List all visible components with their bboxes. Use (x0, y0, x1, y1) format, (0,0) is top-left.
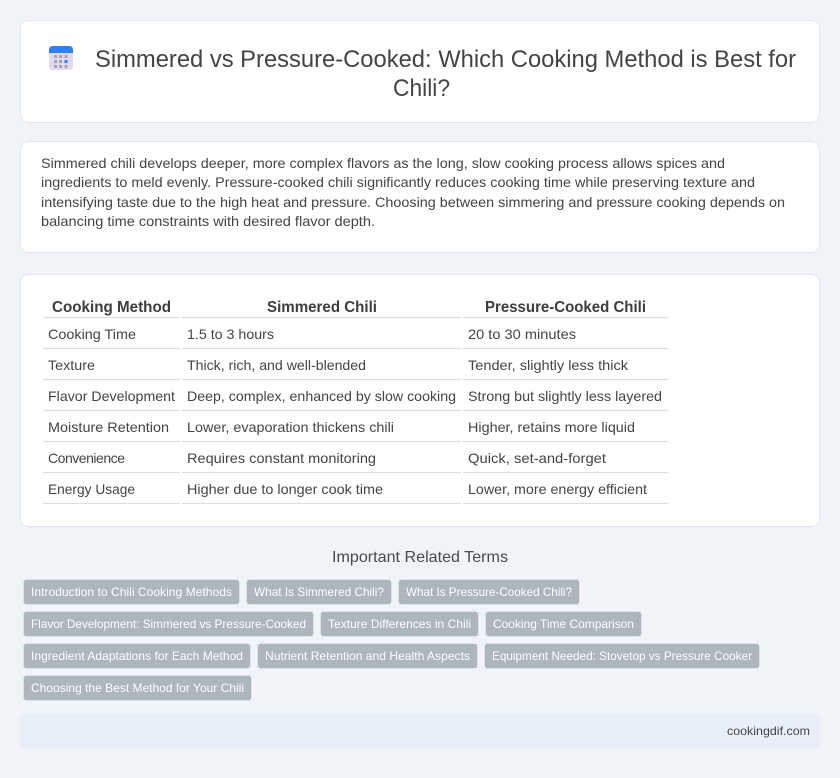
tag: Flavor Development: Simmered vs Pressure-Cooked (31, 617, 306, 631)
tag (486, 612, 642, 636)
panel: header (20, 20, 820, 122)
tag: Choosing the Best Method for Your Chili (31, 681, 244, 695)
table grid lines (43, 318, 668, 504)
row: energy usage (48, 481, 647, 497)
panel: introduction text: intensifying taste due to the high heat and pressure. Choosing between simmering and pressure cooking depends on (41, 194, 785, 210)
panel: introduction text: Simmered chili develops deeper, more complex flavors as the long, slow cooking process allows spices and (41, 155, 725, 171)
row: texture: Texture (48, 357, 95, 373)
tag: Texture Differences in Chili (328, 617, 471, 631)
row: flavor development (48, 388, 662, 404)
icon: calendar (49, 46, 73, 70)
panel: comparison table (20, 274, 820, 526)
row: moisture retention: Lower, evaporation thickens chili (187, 419, 394, 435)
tag: Cooking Time Comparison (493, 617, 634, 631)
panel: introduction text: ingredients to meld evenly. Pressure-cooked chili significantly reduces cooking time while preserving texture and (41, 174, 755, 190)
tag (484, 644, 760, 668)
row: flavor development: Deep, complex, enhanced by slow cooking (187, 388, 456, 404)
related term tags (24, 580, 760, 700)
row: convenience: Quick, set-and-forget (468, 450, 606, 466)
tag: What Is Simmered Chili? (254, 585, 384, 599)
row: texture (48, 357, 629, 373)
heading: related terms: Important Related Terms (332, 549, 508, 566)
tag (24, 580, 240, 604)
tag: Ingredient Adaptations for Each Method (31, 649, 243, 663)
row: cooking time: Cooking Time (48, 326, 136, 342)
row: moisture retention: Higher, retains more liquid (468, 419, 635, 435)
row: energy usage: Lower, more energy efficient (468, 481, 647, 497)
panel: introduction text (20, 142, 820, 252)
tag: Introduction to Chili Cooking Methods (31, 585, 232, 599)
row: convenience: Requires constant monitoring (187, 450, 376, 466)
tag (24, 612, 314, 636)
tag (398, 580, 580, 604)
tag (24, 676, 252, 700)
row: cooking time: 20 to 30 minutes (468, 326, 576, 342)
row: energy usage: Energy Usage (48, 481, 135, 497)
title: Chili? (393, 75, 450, 102)
row: convenience: Convenience (48, 450, 125, 466)
panel: introduction text: balancing time constraints with desired flavor depth. (41, 213, 375, 229)
row: convenience (48, 450, 606, 466)
tag: Nutrient Retention and Health Aspects (265, 649, 470, 663)
tag (320, 612, 478, 636)
title (95, 46, 796, 102)
row: texture: Thick, rich, and well-blended (187, 357, 366, 373)
tag: What Is Pressure-Cooked Chili? (406, 585, 572, 599)
row: moisture retention: Moisture Retention (48, 419, 169, 435)
title: Simmered vs Pressure-Cooked: Which Cooking Method is Best for (95, 46, 796, 73)
row: flavor development: Flavor Development (48, 388, 175, 404)
tag (258, 644, 478, 668)
row: texture: Tender, slightly less thick (468, 357, 629, 373)
footer (20, 714, 820, 748)
table header: Pressure-Cooked Chili (485, 299, 646, 316)
footer: cookingdif.com (727, 724, 810, 738)
table header: Cooking Method (52, 299, 171, 316)
row: flavor development: Strong but slightly less layered (468, 388, 662, 404)
tag: Equipment Needed: Stovetop vs Pressure Cooker (492, 649, 752, 663)
row: cooking time (48, 326, 576, 342)
table header: Simmered Chili (267, 299, 377, 316)
tag (24, 644, 250, 668)
tag (246, 580, 392, 604)
row: energy usage: Higher due to longer cook time (187, 481, 383, 497)
row: cooking time: 1.5 to 3 hours (187, 326, 274, 342)
table header (52, 299, 646, 316)
row: moisture retention (48, 419, 635, 435)
